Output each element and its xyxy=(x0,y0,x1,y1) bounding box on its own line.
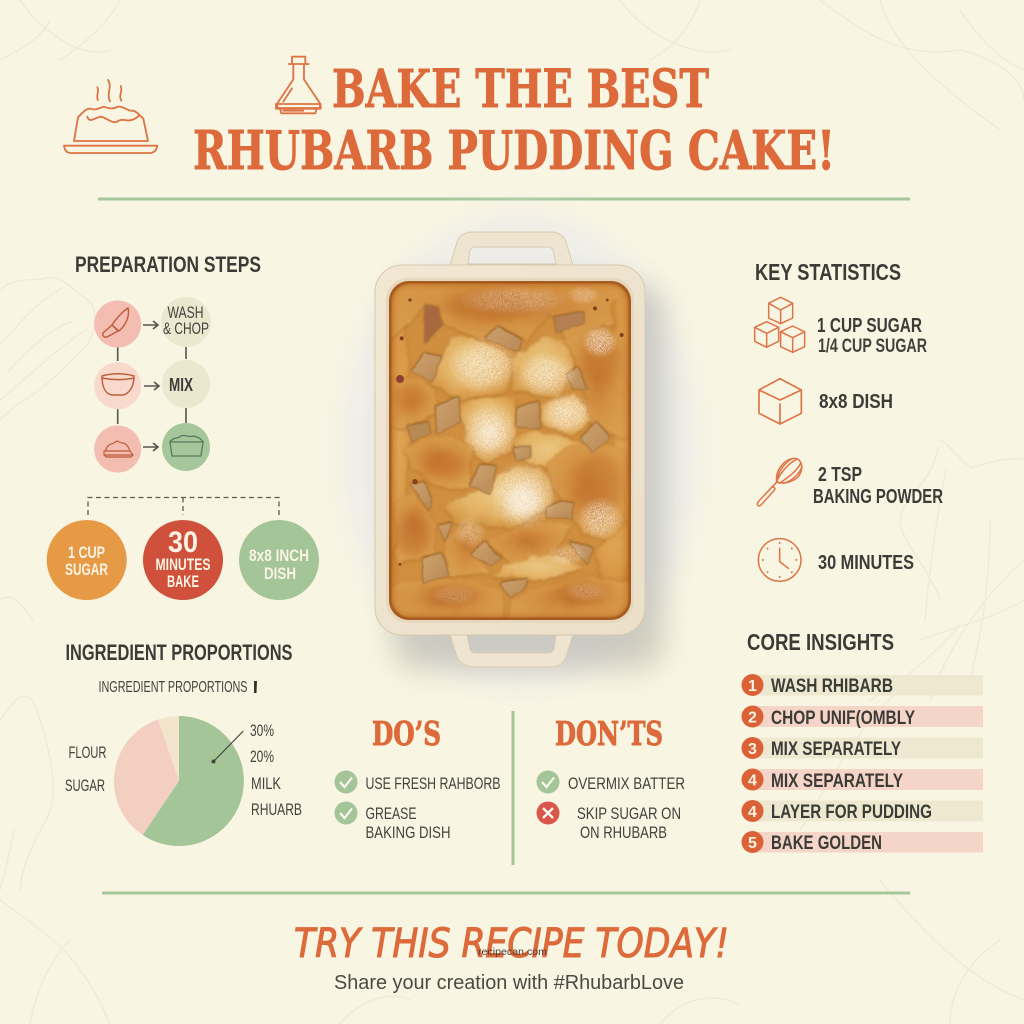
do item 2: GREASE xyxy=(366,804,416,823)
heading: core insights: CORE INSIGHTS xyxy=(747,629,894,655)
stat: baking powder xyxy=(757,458,943,508)
call to action: TRY THIS RECIPE TODAY! xyxy=(294,921,729,967)
step: wash and chop: & CHOP xyxy=(163,320,209,338)
do item 2 xyxy=(334,802,450,842)
do item 2: BAKING DISH xyxy=(366,823,450,842)
stat: time xyxy=(758,539,914,581)
stat: baking powder: BAKING POWDER xyxy=(813,486,943,508)
pie labels xyxy=(65,721,302,819)
dish shadow xyxy=(392,284,664,670)
stat circle: 8x8 inch dish xyxy=(239,520,319,600)
pie labels: SUGAR xyxy=(65,776,105,795)
hashtag line: Share your creation with #RhubarbLove xyxy=(334,972,684,994)
grain xyxy=(396,290,626,614)
do item 1 xyxy=(334,770,500,794)
step: bowl xyxy=(94,362,141,409)
step: cake on tray xyxy=(94,426,141,472)
insight 3 xyxy=(742,737,983,760)
browned rim xyxy=(389,281,631,620)
chart subtitle: INGREDIENT PROPORTIONS xyxy=(98,679,248,696)
don't item 1 xyxy=(536,770,685,794)
powdered sugar xyxy=(430,285,623,605)
don't item 2: ON RHUBARB xyxy=(580,823,667,842)
title: RHUBARB PUDDING CAKE! xyxy=(193,120,835,182)
icon: flask xyxy=(276,57,321,113)
stat: sugar cubes: 1/4 CUP SUGAR xyxy=(818,336,927,357)
pie chart xyxy=(65,716,302,846)
panel: don'ts: DON’TS xyxy=(555,714,663,753)
cake xyxy=(383,275,637,625)
leader line xyxy=(214,731,243,762)
insight 2: CHOP UNIF(OMBLY xyxy=(771,708,915,729)
dish handles xyxy=(448,232,575,667)
step: mix xyxy=(162,360,210,408)
insight 3: 3 xyxy=(748,741,757,758)
step: wash and chop: WASH xyxy=(168,304,204,322)
stat circle: 8x8 inch dish: DISH xyxy=(264,564,296,583)
stat circle: 30 minutes bake: BAKE xyxy=(167,572,199,591)
insight 4: 4 xyxy=(748,772,757,790)
photo: rhubarb pudding cake in dish xyxy=(375,232,645,667)
step: loaf in dish xyxy=(162,423,210,471)
divider: bottom xyxy=(102,892,910,894)
insight 3: MIX SEPARATELY xyxy=(771,739,901,760)
baked edge xyxy=(390,282,630,619)
heading: ingredient proportions: INGREDIENT PROPORTIONS xyxy=(66,640,292,665)
stat circle: 1 cup sugar xyxy=(47,520,127,600)
insight 5: 4 xyxy=(748,804,757,821)
insight 5: LAYER FOR PUDDING xyxy=(771,802,932,823)
step: knife xyxy=(94,300,141,348)
stat: baking powder: 2 TSP xyxy=(818,464,862,486)
stat: dish size: 8x8 DISH xyxy=(819,391,893,413)
don't item 2 xyxy=(536,802,681,842)
insight 6: 5 xyxy=(748,835,757,852)
pie labels: FLOUR xyxy=(68,743,106,762)
insight 4: MIX SEPARATELY xyxy=(771,771,903,792)
dashed connector xyxy=(88,498,279,515)
rhubarb chunks xyxy=(407,305,610,598)
insight 1: WASH RHIBARB xyxy=(771,676,893,697)
pie labels: RHUARB xyxy=(251,800,302,819)
icon: steaming cake xyxy=(64,80,157,153)
don't item 2: SKIP SUGAR ON xyxy=(577,804,681,823)
title: BAKE THE BEST xyxy=(332,59,709,120)
stat: sugar cubes: 1 CUP SUGAR xyxy=(817,315,922,337)
step: mix: MIX xyxy=(169,375,193,395)
heading: key statistics: KEY STATISTICS xyxy=(755,259,901,285)
insight 4 xyxy=(742,768,983,792)
pie labels: MILK xyxy=(251,774,281,793)
don't item 1: OVERMIX BATTER xyxy=(568,774,685,793)
stat: time: 30 MINUTES xyxy=(818,552,914,574)
heading: preparation steps: PREPARATION STEPS xyxy=(75,252,261,277)
watermark: recipecan.com xyxy=(478,946,547,958)
browned patches xyxy=(393,292,620,603)
insight 2 xyxy=(742,706,983,729)
stat circle: 1 cup sugar: SUGAR xyxy=(65,560,108,579)
stat circle: 8x8 inch dish: 8x8 INCH xyxy=(249,546,309,565)
stat circle: 30 minutes bake: MINUTES xyxy=(156,555,210,574)
step: wash and chop xyxy=(161,297,211,347)
stat: sugar cubes xyxy=(755,297,927,357)
dish body xyxy=(375,265,645,635)
stat: dish size xyxy=(759,379,893,424)
stat circle: 30 minutes bake xyxy=(143,520,223,600)
do item 1: USE FRESH RAHBORB xyxy=(366,774,500,793)
panel: don'ts xyxy=(536,714,685,842)
insight 6: BAKE GOLDEN xyxy=(771,833,882,854)
insight 1: 1 xyxy=(748,678,757,695)
panel: do's xyxy=(334,714,500,842)
flowchart: preparation steps xyxy=(94,297,211,472)
stat circle: 30 minutes bake: 30 xyxy=(168,526,198,559)
divider: top xyxy=(98,198,910,200)
pie labels: 30% xyxy=(250,721,274,740)
dough lumps xyxy=(383,275,637,625)
dark specks xyxy=(396,298,624,566)
insight 2: 2 xyxy=(748,710,757,726)
vertical divider xyxy=(512,711,514,865)
arrows xyxy=(143,321,159,451)
title xyxy=(193,59,835,182)
insight 1 xyxy=(742,674,983,697)
panel: do's: DO’S xyxy=(372,714,441,753)
list: core insights xyxy=(742,674,983,854)
insight 6 xyxy=(742,831,983,854)
marble backdrop xyxy=(342,214,698,686)
stat circle: 1 cup sugar: 1 CUP xyxy=(68,543,105,562)
pie labels: 20% xyxy=(250,747,274,766)
